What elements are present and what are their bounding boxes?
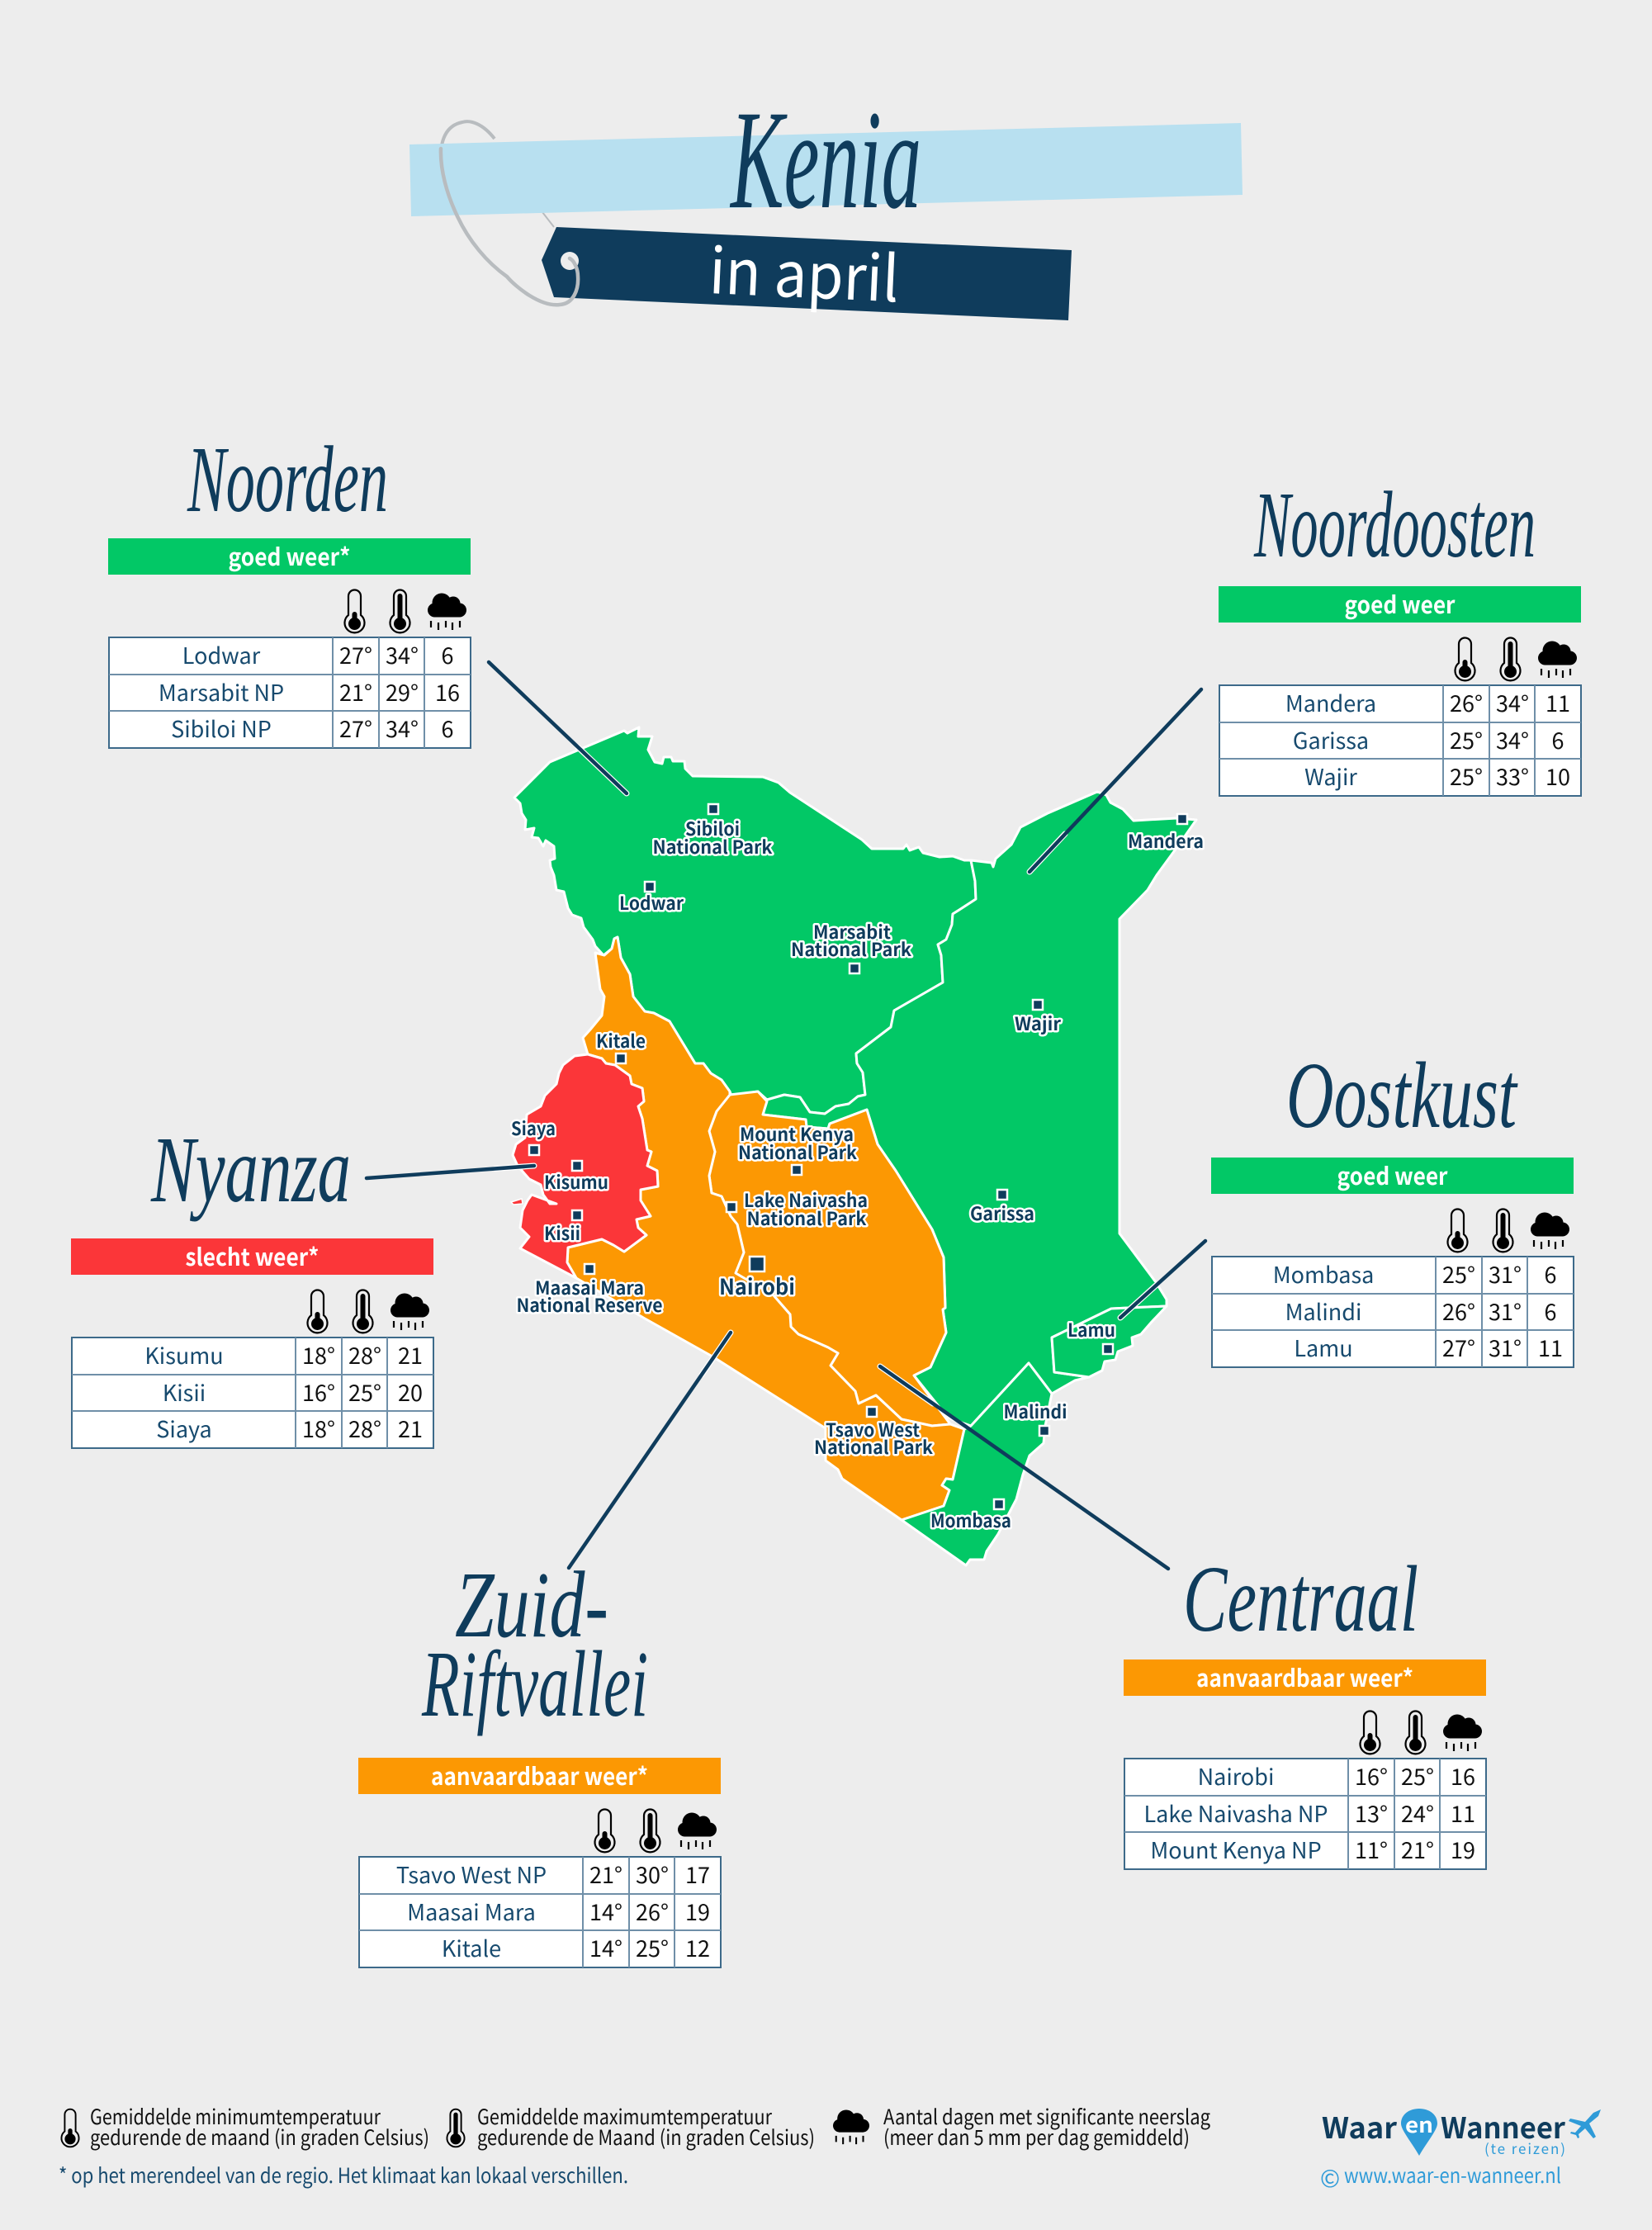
panel: Noordoosten: 11 bbox=[1545, 686, 1570, 718]
logo bbox=[1320, 2105, 1601, 2194]
heading: Noordoosten bbox=[1253, 473, 1536, 577]
map labels: Sibiloi bbox=[685, 815, 740, 841]
icon: plane bbox=[1569, 2109, 1601, 2138]
icons bbox=[307, 1290, 327, 1333]
map labels: National Park bbox=[652, 833, 773, 859]
panel: Zuid-Riftvallei: aanvaardbaar weer* bbox=[431, 1758, 648, 1792]
panel: Centraal: aanvaardbaar weer* bbox=[1196, 1659, 1413, 1694]
panel: Noordoosten: 25° bbox=[1450, 723, 1483, 755]
icons bbox=[1448, 1209, 1468, 1252]
legend: rain days: (meer dan 5 mm per dag gemiddeld) bbox=[883, 2122, 1190, 2152]
map labels: Lake Naivasha bbox=[744, 1186, 868, 1213]
panel: Zuid-Riftvallei: Kitale bbox=[442, 1931, 501, 1963]
heading: Oostkust bbox=[1286, 1044, 1518, 1148]
footnote: * op het merendeel van de regio. Het klimaat kan lokaal verschillen. bbox=[59, 2160, 628, 2190]
panel: Zuid-Riftvallei: 25° bbox=[636, 1931, 669, 1963]
status bar bbox=[71, 1238, 433, 1275]
leader: Oostkust bbox=[1120, 1241, 1205, 1318]
leader: Centraal bbox=[880, 1366, 1168, 1569]
panel: Noorden: 6 bbox=[441, 712, 454, 744]
panel: Centraal: Mount Kenya NP bbox=[1150, 1833, 1322, 1865]
map labels: Nairobi bbox=[719, 1271, 795, 1301]
icons bbox=[594, 1810, 614, 1852]
panel: Centraal: 16° bbox=[1355, 1759, 1388, 1792]
heading: Riftvallei bbox=[421, 1632, 648, 1736]
panel: Centraal: 24° bbox=[1401, 1797, 1434, 1829]
legend: min temperature bbox=[61, 2101, 429, 2152]
map labels: Marsabit bbox=[813, 918, 891, 945]
table bbox=[72, 1338, 433, 1448]
leader halo bbox=[495, 747, 1156, 1404]
logo: www.waar-en-wanneer.nl bbox=[1344, 2160, 1561, 2190]
region: Oostkust Mombasa-Malindi bbox=[902, 1363, 1052, 1565]
panel: Noordoosten: 10 bbox=[1545, 760, 1570, 792]
region: Noorden bbox=[514, 727, 976, 1114]
leader: Nyanza bbox=[367, 1166, 534, 1178]
region: Zuid-Riftvallei bbox=[567, 937, 964, 1520]
panel: Nyanza: 28° bbox=[348, 1412, 381, 1444]
panel: Oostkust: goed weer bbox=[1337, 1158, 1448, 1192]
region: Oostkust Lamu bbox=[1052, 1306, 1167, 1377]
panel: Noorden: 29° bbox=[386, 675, 419, 708]
title text: Kenia bbox=[730, 83, 921, 239]
table bbox=[359, 1857, 721, 1967]
leader: Noordoosten bbox=[1030, 689, 1201, 872]
map labels: Mombasa bbox=[930, 1507, 1011, 1533]
heading bbox=[421, 1553, 648, 1736]
leader: Zuid-Riftvallei bbox=[569, 1333, 731, 1568]
panel: Zuid-Riftvallei: 14° bbox=[589, 1931, 622, 1963]
panel: Zuid-Riftvallei: 26° bbox=[636, 1895, 669, 1927]
panel: Noordoosten: 25° bbox=[1450, 760, 1483, 792]
panel: Zuid-Riftvallei: 14° bbox=[589, 1895, 622, 1927]
map labels: Wajir bbox=[1015, 1010, 1061, 1036]
panel: Oostkust: 27° bbox=[1442, 1331, 1475, 1363]
title band bbox=[409, 123, 1243, 216]
panel: Nyanza: Siaya bbox=[156, 1412, 212, 1444]
panel: Noorden: Marsabit NP bbox=[159, 675, 284, 708]
icon: location pin bbox=[1401, 2109, 1437, 2156]
map labels: Siaya bbox=[511, 1115, 556, 1141]
panel: Centraal: 21° bbox=[1401, 1833, 1434, 1865]
panel: Zuid-Riftvallei: 19 bbox=[685, 1895, 710, 1927]
logo: Wanneer bbox=[1441, 2105, 1566, 2147]
icons bbox=[345, 589, 365, 632]
panel: Noorden: 16 bbox=[435, 675, 460, 708]
map labels: Lodwar bbox=[619, 889, 684, 916]
panel: Noordoosten: 6 bbox=[1552, 723, 1564, 755]
logo: (te reizen) bbox=[1484, 2138, 1565, 2158]
status bar bbox=[1219, 586, 1581, 623]
subtitle: in april bbox=[708, 220, 902, 320]
map labels: Kisii bbox=[544, 1219, 580, 1246]
map labels: National Park bbox=[746, 1205, 867, 1231]
status bar bbox=[1124, 1659, 1486, 1696]
legend: max temperature: Gemiddelde maximumtemperatuur bbox=[477, 2101, 772, 2131]
map labels: Kisumu bbox=[544, 1168, 608, 1195]
panel: Zuid-Riftvallei: Tsavo West NP bbox=[396, 1858, 547, 1890]
panel: Noorden: 34° bbox=[386, 638, 419, 670]
panel: Nyanza: 18° bbox=[302, 1338, 335, 1371]
panel: Noordoosten: goed weer bbox=[1344, 586, 1456, 621]
tag hole bbox=[561, 252, 579, 270]
panel: Oostkust bbox=[1211, 1044, 1574, 1367]
panel: Noordoosten: Garissa bbox=[1293, 723, 1369, 755]
legend: max temperature: gedurende de Maand (in graden Celsius) bbox=[477, 2122, 815, 2152]
panel: Zuid-Riftvallei: 30° bbox=[636, 1858, 669, 1890]
map markers bbox=[529, 804, 1187, 1509]
panel: Zuid-Riftvallei: 12 bbox=[685, 1931, 710, 1963]
panel: Oostkust: Malindi bbox=[1285, 1295, 1361, 1327]
panel: Noordoosten: 26° bbox=[1450, 686, 1483, 718]
panel: Centraal: 11° bbox=[1355, 1833, 1388, 1865]
status bar bbox=[358, 1758, 721, 1794]
tag string behind band bbox=[441, 121, 495, 165]
map labels: Maasai Mara bbox=[535, 1274, 644, 1300]
navy tag bbox=[542, 227, 1072, 320]
panel: Noordoosten: 33° bbox=[1496, 760, 1529, 792]
panel: Noorden: 21° bbox=[339, 675, 372, 708]
table bbox=[109, 637, 471, 748]
panel: Nyanza: 21 bbox=[398, 1412, 423, 1444]
panel: Oostkust: 26° bbox=[1442, 1295, 1475, 1327]
panel: Centraal: 19 bbox=[1451, 1833, 1475, 1865]
icon: copyright: © bbox=[1320, 2160, 1340, 2194]
tag string front bbox=[441, 149, 578, 305]
leader lines bbox=[367, 662, 1205, 1569]
panel: Noordoosten: Mandera bbox=[1285, 686, 1376, 718]
panel: Zuid-Riftvallei: Maasai Mara bbox=[407, 1895, 536, 1927]
map labels: Lamu bbox=[1067, 1316, 1115, 1342]
table bbox=[1212, 1257, 1574, 1367]
panel: Oostkust: 6 bbox=[1544, 1257, 1557, 1290]
legend: rain days: Aantal dagen met significante neerslag bbox=[883, 2101, 1210, 2131]
panel: Zuid-Riftvallei bbox=[358, 1553, 721, 1967]
map labels: National Reserve bbox=[517, 1291, 662, 1318]
icons bbox=[1455, 637, 1474, 680]
map labels: Garissa bbox=[970, 1200, 1034, 1226]
panel: Nyanza: 18° bbox=[302, 1412, 335, 1444]
panel: Oostkust: Lamu bbox=[1294, 1331, 1353, 1363]
panel: Nyanza: slecht weer* bbox=[185, 1238, 319, 1273]
panel: Noorden: 34° bbox=[386, 712, 419, 744]
icons bbox=[1361, 1711, 1380, 1754]
map labels: Malindi bbox=[1004, 1398, 1067, 1424]
panel: Centraal: Nairobi bbox=[1198, 1759, 1274, 1792]
panel: Centraal: 13° bbox=[1355, 1797, 1388, 1829]
panel: Noordoosten bbox=[1219, 473, 1581, 796]
logo: Waar bbox=[1322, 2105, 1398, 2147]
legend: rain days bbox=[833, 2101, 1210, 2152]
region: Noordoosten bbox=[763, 792, 1196, 1426]
legend: min temperature: Gemiddelde minimumtemperatuur bbox=[90, 2101, 381, 2131]
table bbox=[1219, 685, 1581, 796]
map labels bbox=[511, 815, 1204, 1533]
title block bbox=[409, 83, 1243, 320]
panel: Nyanza bbox=[71, 1118, 433, 1448]
map of Kenya bbox=[511, 727, 1196, 1565]
heading: Zuid- bbox=[455, 1553, 608, 1657]
legend: max temperature bbox=[447, 2101, 815, 2152]
status bar bbox=[1211, 1158, 1574, 1194]
panel: Oostkust: 25° bbox=[1442, 1257, 1475, 1290]
legend: min temperature: gedurende de maand (in graden Celsius) bbox=[90, 2122, 429, 2152]
panel: Noorden: goed weer* bbox=[228, 538, 350, 573]
panel: Nyanza: Kisii bbox=[163, 1375, 206, 1408]
panel: Zuid-Riftvallei: 17 bbox=[685, 1858, 710, 1890]
table bbox=[1124, 1759, 1486, 1869]
panel: Centraal: 25° bbox=[1401, 1759, 1434, 1792]
panel: Centraal: 11 bbox=[1451, 1797, 1475, 1829]
panel: Nyanza: Kisumu bbox=[144, 1338, 224, 1371]
heading: Noorden bbox=[187, 428, 388, 532]
status bar bbox=[108, 538, 471, 575]
map labels: Mount Kenya bbox=[740, 1120, 854, 1147]
panel: Oostkust: 6 bbox=[1544, 1295, 1557, 1327]
map labels: Kitale bbox=[596, 1027, 646, 1053]
panel: Noorden bbox=[108, 428, 471, 748]
panel: Nyanza: 21 bbox=[398, 1338, 423, 1371]
panel: Nyanza: 28° bbox=[348, 1338, 381, 1371]
panel: Oostkust: 31° bbox=[1489, 1331, 1522, 1363]
map labels: Mandera bbox=[1128, 827, 1204, 854]
panel: Noordoosten: 34° bbox=[1496, 686, 1529, 718]
map labels: National Park bbox=[814, 1433, 934, 1460]
panel: Oostkust: 31° bbox=[1489, 1295, 1522, 1327]
panel: Oostkust: 31° bbox=[1489, 1257, 1522, 1290]
heading: Centraal bbox=[1183, 1547, 1418, 1651]
logo: en bbox=[1405, 2109, 1433, 2139]
panel: Noordoosten: Wajir bbox=[1304, 760, 1357, 792]
panel: Noordoosten: 34° bbox=[1496, 723, 1529, 755]
panel: Noorden: 27° bbox=[339, 712, 372, 744]
panel: Centraal: Lake Naivasha NP bbox=[1144, 1797, 1328, 1829]
panel: Nyanza: 20 bbox=[398, 1375, 423, 1408]
panel: Noorden: 27° bbox=[339, 638, 372, 670]
panel: Oostkust: Mombasa bbox=[1273, 1257, 1374, 1290]
region: Nyanza bbox=[513, 1054, 658, 1278]
region: Nyanza island bbox=[511, 1199, 523, 1205]
map labels: National Park bbox=[791, 935, 912, 962]
panel: Noorden: Sibiloi NP bbox=[171, 712, 272, 744]
panel: Noorden: Lodwar bbox=[182, 638, 261, 670]
panel: Noorden: 6 bbox=[441, 638, 454, 670]
leader: Noorden bbox=[489, 662, 627, 793]
panel: Centraal bbox=[1124, 1547, 1486, 1869]
region: Centraal bbox=[709, 1091, 950, 1426]
panel: Nyanza: 16° bbox=[302, 1375, 335, 1408]
panel: Nyanza: 25° bbox=[348, 1375, 381, 1408]
heading: Nyanza bbox=[150, 1118, 351, 1222]
panel: Zuid-Riftvallei: 21° bbox=[589, 1858, 622, 1890]
map labels: National Park bbox=[738, 1139, 858, 1165]
panel: Oostkust: 11 bbox=[1538, 1331, 1563, 1363]
legend bbox=[59, 2101, 1210, 2190]
panel: Centraal: 16 bbox=[1451, 1759, 1475, 1792]
map labels: Tsavo West bbox=[826, 1416, 920, 1442]
